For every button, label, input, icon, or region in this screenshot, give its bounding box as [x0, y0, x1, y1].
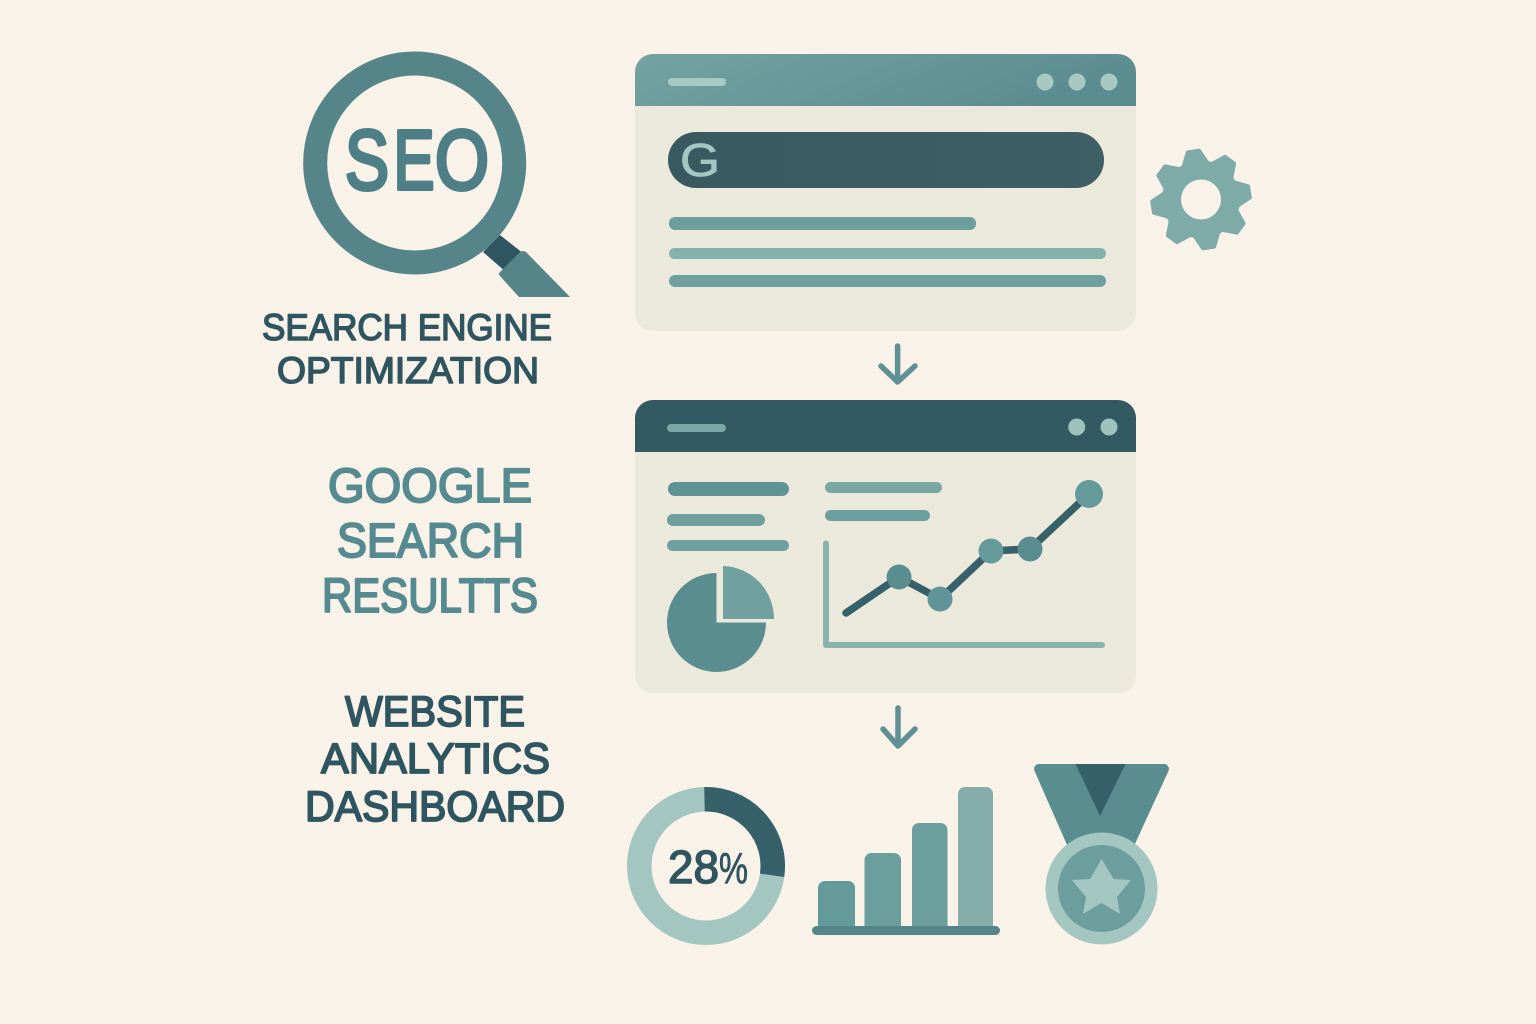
heading: google search results: SEARCH: [337, 515, 524, 568]
address bar placeholder: [667, 424, 726, 432]
magnifier handle neck: [483, 235, 524, 272]
SEO lettering: O: [435, 113, 489, 207]
medal ribbon: [1034, 764, 1169, 846]
donut value: %: [719, 844, 748, 893]
arrow: results to metrics: [883, 708, 915, 746]
left text lines: [667, 482, 789, 551]
right text lines: [825, 482, 942, 521]
bar chart: [812, 787, 1000, 935]
panel: analytics browser window: [635, 400, 1136, 693]
heading: search engine optimization: SEARCH ENGINE: [262, 307, 552, 348]
SEO lettering: E: [394, 113, 434, 207]
heading: website analytics dashboard: DASHBOARD: [305, 783, 565, 831]
search bar: [668, 132, 1104, 188]
medal ribbon fold: [1076, 764, 1126, 816]
browser body: [635, 54, 1136, 331]
heading: search engine optimization: [262, 307, 552, 391]
medal star: [1072, 859, 1131, 914]
bars: [818, 787, 993, 927]
trend line: [846, 494, 1089, 613]
heading: google search results: [322, 460, 538, 623]
heading: website analytics dashboard: ANALYTICS: [321, 735, 550, 783]
icon: SEO magnifying glass: [315, 64, 570, 297]
browser body: [635, 400, 1136, 693]
arrow: search to results: [881, 346, 915, 382]
line chart: [826, 480, 1103, 645]
heading: website analytics dashboard: [305, 688, 565, 831]
donut chart: 28%: [639, 799, 773, 933]
icon: medal: [1034, 764, 1169, 944]
heading: website analytics dashboard: WEBSITE: [345, 688, 525, 736]
donut highlighted arc: [704, 799, 773, 875]
window control dots: [1068, 418, 1118, 436]
panel: search browser window: [635, 54, 1136, 331]
donut value: 28: [668, 841, 719, 893]
heading: search engine optimization: OPTIMIZATION: [277, 350, 539, 391]
bar chart baseline: [812, 926, 1000, 935]
heading: google search results: RESULTTS: [322, 570, 538, 623]
icon: G logo: G: [680, 134, 720, 186]
pie chart: [667, 566, 774, 672]
SEO lettering: S: [345, 113, 389, 207]
result lines: [669, 217, 1106, 287]
magnifier ring: [315, 64, 514, 262]
medal inner disc: [1058, 845, 1145, 932]
medal disc: [1046, 832, 1158, 944]
heading: google search results: GOOGLE: [328, 460, 532, 513]
data points: [886, 480, 1103, 612]
icon: gear: [1151, 149, 1251, 250]
browser title bar: [635, 400, 1136, 452]
magnifier handle grip: [499, 251, 570, 297]
donut track: [639, 799, 773, 933]
address bar placeholder: [668, 78, 726, 86]
browser title bar: [635, 54, 1136, 106]
chart axes: [826, 544, 1102, 645]
window control dots: [1036, 74, 1118, 90]
